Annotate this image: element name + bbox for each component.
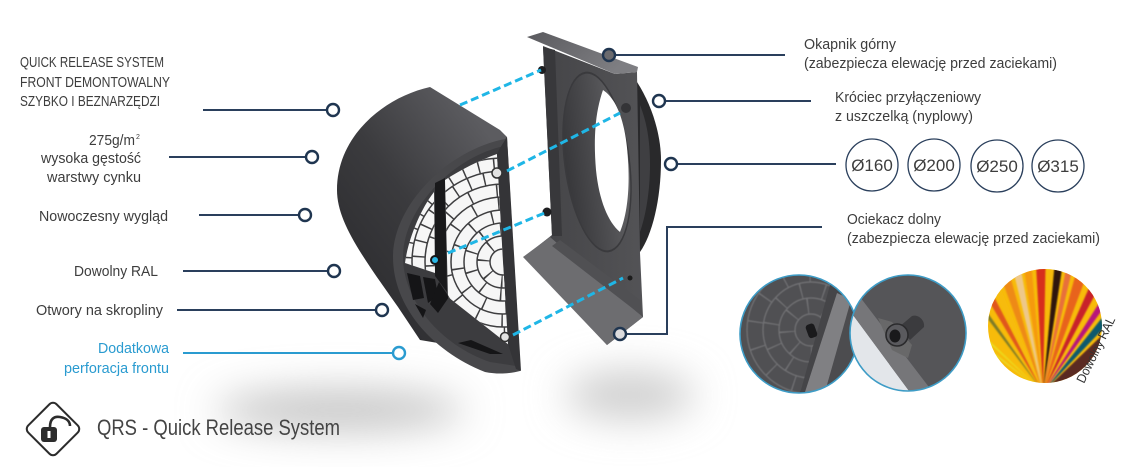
diameter 315: Ø315 [1037,157,1079,176]
QRS badge [25,401,340,457]
chord edge [497,137,521,371]
inset: grille detail [739,274,854,394]
grille [405,154,508,344]
diameter 160: Ø160 [851,156,893,175]
icon: unlocked padlock in diamond [25,401,81,457]
diameter 160 [846,139,898,191]
callout: zinc density: warstwy cynku [46,170,141,186]
callout: bottom drip [614,212,1100,340]
rotated label: Dowolny RAL [1073,314,1118,385]
callout: bottom drip: Ociekacz dolny [847,212,942,228]
callout: extra perforation: Dodatkowa [98,341,170,357]
dashed assembly lines [448,70,623,335]
callout: zinc density: 2 [136,134,140,141]
lower rib panel [407,273,503,354]
bottom drip flange [523,237,643,345]
spigot ring [553,68,641,256]
callout: top drip [603,37,1057,72]
floor shadows [215,371,695,430]
diameter 200 [908,139,960,191]
callout: modern look: Nowoczesny wygląd [39,209,168,225]
QRS title: QRS - Quick Release System [97,415,340,440]
fixing pins [492,168,502,178]
top drip flange [527,32,638,74]
hood rim [393,137,520,374]
diameter 200: Ø200 [913,156,955,175]
callout: quick release [20,55,339,116]
callout: any RAL [74,264,340,280]
callout: any RAL: Dowolny RAL [74,264,158,280]
callout: zinc density: wysoka gęstość [40,151,141,167]
callout: zinc density [40,133,318,186]
callout: extra perforation [64,341,405,377]
plate [524,46,643,345]
callout: condensate holes: Otwory na skropliny [36,303,164,319]
callout: extra perforation: perforacja frontu [64,361,169,377]
diameter 315 [1032,140,1084,192]
callout: condensate holes [36,303,388,319]
black strip behind grille [435,178,447,292]
diameter 250 [971,140,1023,192]
inset: pin detail [845,275,966,395]
callout: modern look [39,209,311,225]
callout: quick release: QUICK RELEASE SYSTEM [20,55,164,71]
callout: bottom drip: (zabezpiecza elewację przed zaciekami) [847,231,1100,247]
plate bolts [538,66,546,74]
rear ring [632,82,661,252]
hood front face [403,147,516,366]
callout: quick release: FRONT DEMONTOWALNY [20,75,170,91]
hood body [337,87,507,350]
spigot opening [595,90,629,232]
callout: top drip: (zabezpiecza elewację przed zaciekami) [804,56,1057,72]
left channel [543,47,562,236]
callout: diameters [665,139,1084,192]
callout: spigot: z uszczelką (nyplowy) [835,109,973,125]
diameter 250: Ø250 [976,157,1018,176]
callout: top drip: Okapnik górny [804,37,897,53]
callout: spigot [653,90,982,125]
inset: RAL colour fan [988,269,1116,384]
callout: quick release: SZYBKO I BEZNARZĘDZI [20,94,160,110]
product: front hood [337,87,521,374]
callout: zinc density: 275g/m [89,133,135,149]
product: mounting plate with spigot [523,32,661,345]
callout: spigot: Króciec przyłączeniowy [835,90,982,106]
